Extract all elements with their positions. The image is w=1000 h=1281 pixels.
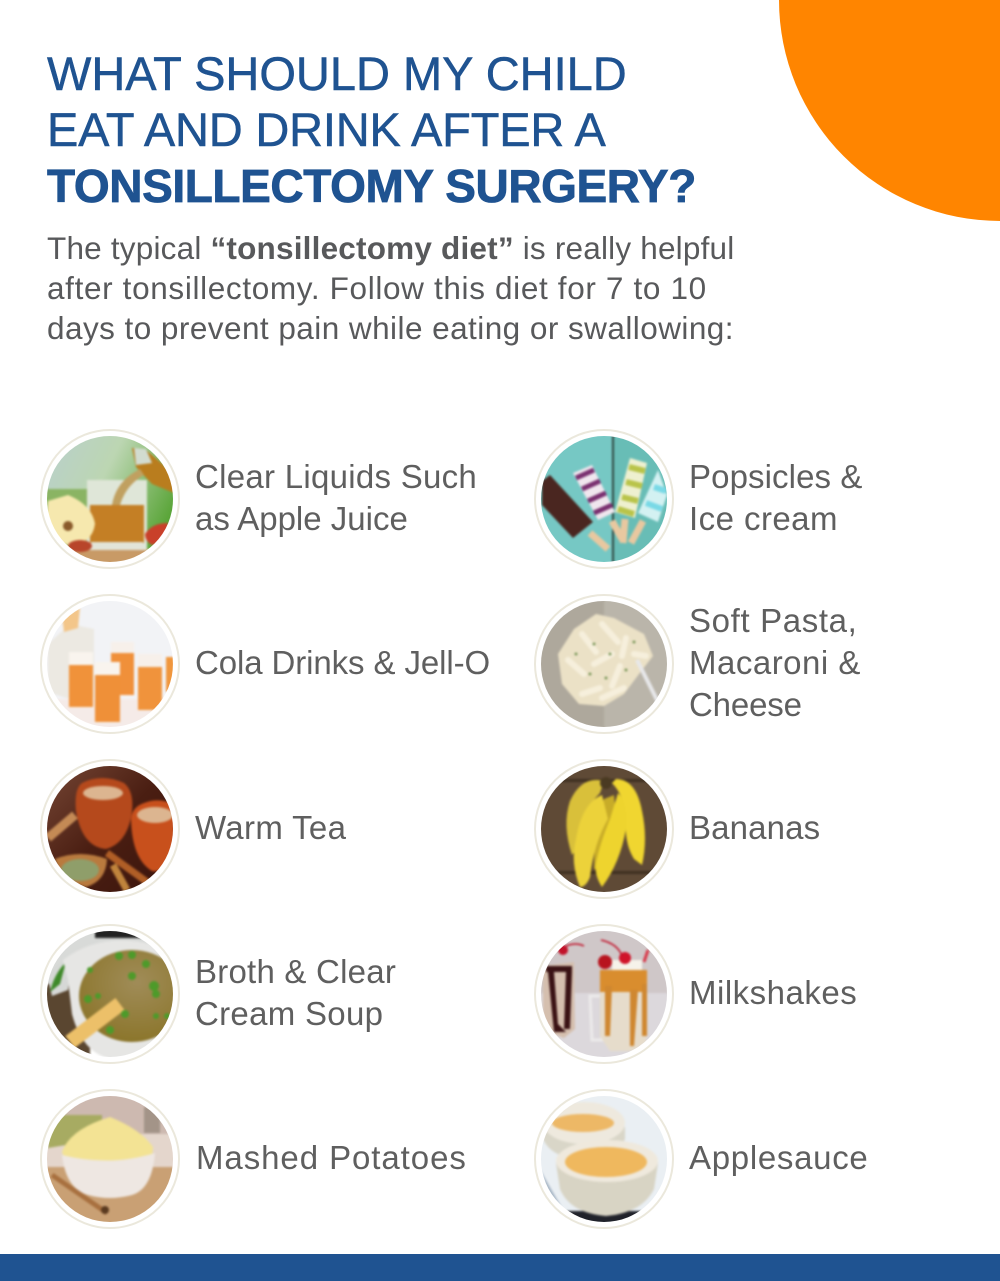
item: applesauce xyxy=(534,1089,868,1229)
icon: orange drinks photo xyxy=(40,594,180,734)
label xyxy=(195,953,396,1032)
title: TONSILLECTOMY SURGERY? xyxy=(47,160,696,212)
title: WHAT SHOULD MY CHILD xyxy=(47,47,627,100)
item: warm tea xyxy=(40,759,346,899)
icon: popsicles photo xyxy=(534,429,674,569)
label: Bananas xyxy=(689,809,820,846)
label: Mashed Potatoes xyxy=(196,1139,467,1176)
label: Ice cream xyxy=(689,500,838,537)
item: apple juice xyxy=(40,429,477,569)
label: Broth & Clear xyxy=(195,953,396,990)
title: EAT AND DRINK AFTER A xyxy=(47,103,606,156)
intro text: The typical “tonsillectomy diet” is really helpful xyxy=(47,230,734,266)
item: broth xyxy=(40,924,396,1064)
intro text xyxy=(47,230,734,346)
icon: mashed potatoes photo xyxy=(40,1089,180,1229)
title xyxy=(46,47,696,212)
label: as Apple Juice xyxy=(195,500,408,537)
label: Warm Tea xyxy=(195,809,346,846)
label: Applesauce xyxy=(689,1139,868,1176)
label xyxy=(195,458,477,537)
label: Macaroni & xyxy=(689,644,861,681)
icon: pasta photo xyxy=(534,594,674,734)
label: Milkshakes xyxy=(689,974,857,1011)
label: Popsicles & xyxy=(689,458,863,495)
item: pasta xyxy=(534,594,861,734)
footer bar xyxy=(0,1254,1000,1281)
icon: clay tea cups photo xyxy=(40,759,180,899)
label: Cheese xyxy=(689,686,802,723)
label: Cola Drinks & Jell-O xyxy=(195,644,490,681)
decorative orange circle xyxy=(779,0,1000,221)
item: milkshakes xyxy=(534,924,857,1064)
item: popsicles xyxy=(534,429,863,569)
item: cola drinks and jell-o xyxy=(40,594,490,734)
label: Cream Soup xyxy=(195,995,383,1032)
icon: applesauce bowls photo xyxy=(534,1089,674,1229)
icon: apple juice photo xyxy=(40,429,180,569)
label: Clear Liquids Such xyxy=(195,458,477,495)
item: bananas xyxy=(534,759,820,899)
intro text: days to prevent pain while eating or swallowing: xyxy=(47,310,734,346)
intro text: after tonsillectomy. Follow this diet for 7 to 10 xyxy=(47,270,707,306)
icon: milkshakes photo xyxy=(534,924,674,1064)
label xyxy=(689,602,861,723)
label: Soft Pasta, xyxy=(689,602,857,639)
icon: soup bowl photo xyxy=(40,924,180,1064)
item: mashed potatoes xyxy=(40,1089,467,1229)
icon: bananas photo xyxy=(534,759,674,899)
label xyxy=(689,458,863,537)
